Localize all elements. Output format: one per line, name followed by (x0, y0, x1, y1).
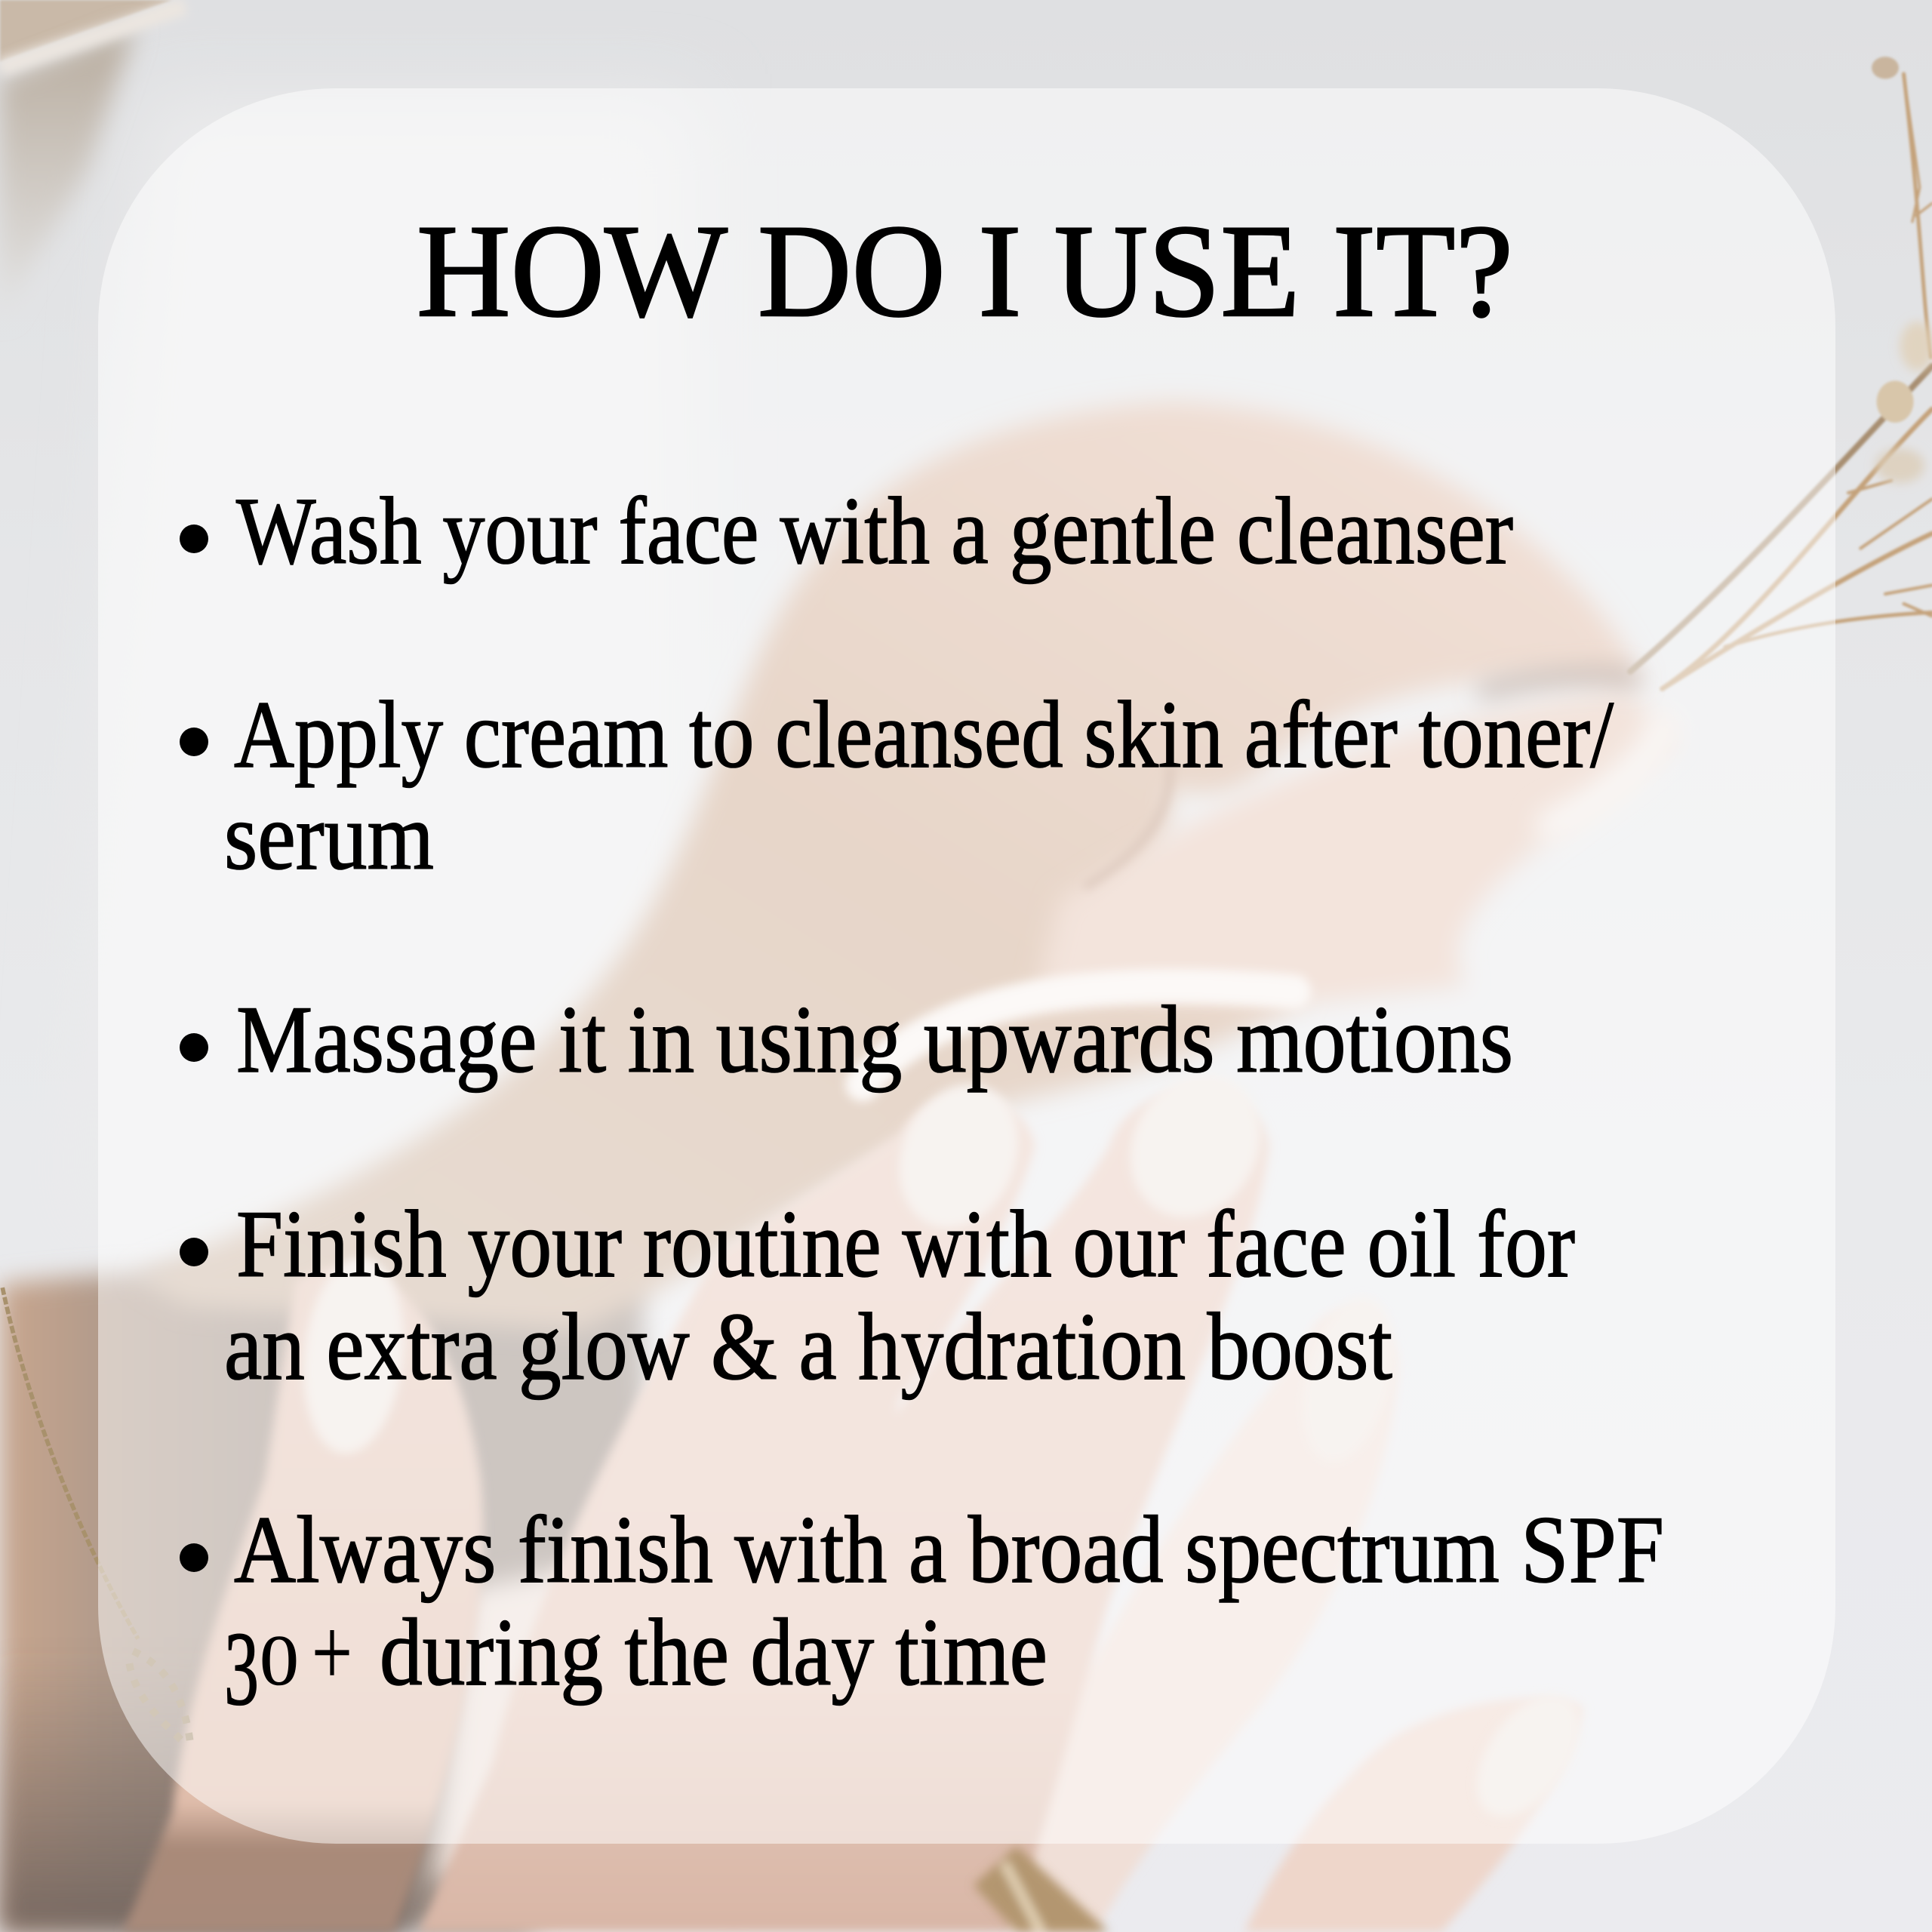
step 4: face oil (180, 1192, 1575, 1400)
step 2: apply cream: Apply cream to cleansed skin after toner/ (234, 682, 1614, 788)
dried flower branch (1630, 57, 1932, 689)
fingernails (294, 1051, 1600, 1835)
step 4: face oil: Finish your routine with our face oil for (236, 1192, 1575, 1297)
step 5: SPF: 0 (260, 1620, 299, 1700)
step 4: face oil: an extra glow & a hydration boost (224, 1294, 1392, 1400)
back of the upper hand (136, 401, 1641, 1331)
step list (180, 478, 1664, 1727)
lower fingers (123, 1091, 1583, 1932)
gold ring (974, 1846, 1109, 1932)
step 5: SPF: + (312, 1600, 352, 1706)
title: HOW DO I USE IT? (417, 198, 1513, 345)
step 5: SPF: 3 (224, 1611, 259, 1727)
cream on the hand (863, 986, 1294, 1084)
upper thumb crease (1035, 690, 1675, 1004)
step 2: apply cream (180, 682, 1614, 890)
step 5: SPF: Always finish with a broad spectrum SPF (234, 1497, 1664, 1603)
step 2: apply cream: serum (224, 784, 434, 890)
gold chain bracelet (2, 1287, 191, 1749)
step 5: SPF (180, 1497, 1664, 1727)
sleeve and upper-left fabric (0, 0, 208, 277)
step 1: cleanse: Wash your face with a gentle cleanser (236, 478, 1513, 584)
dark wrist and palm, lower left (0, 1267, 653, 1932)
step 5: SPF: during the day time (380, 1600, 1048, 1706)
step 3: massage: Massage it in using upwards motions (236, 987, 1513, 1093)
